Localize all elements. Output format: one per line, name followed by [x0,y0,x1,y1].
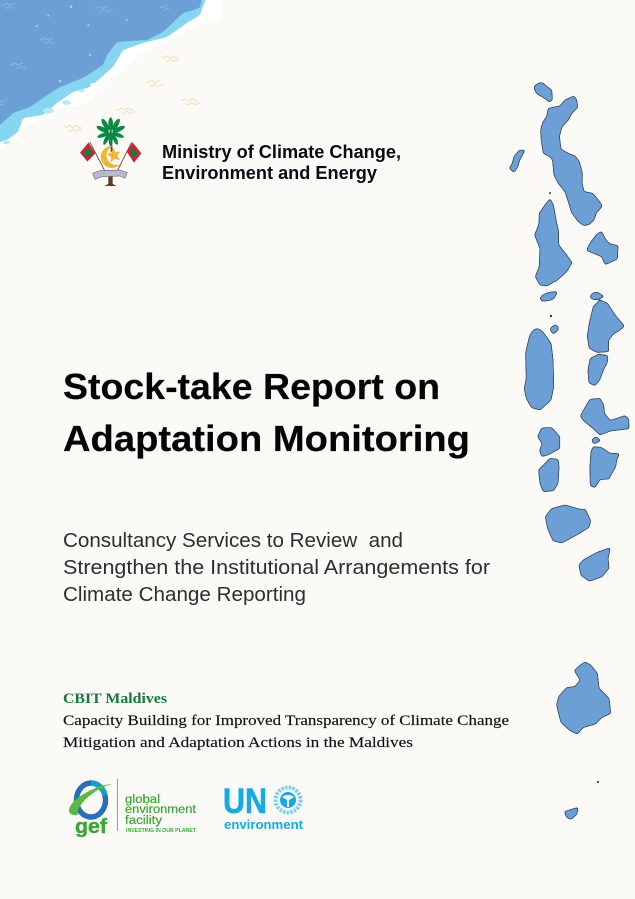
logo: UN environment: environment [224,818,304,832]
logo: global environment facility: global [125,794,160,806]
project description: Mitigation and Adaptation Actions in the Maldives [63,735,413,751]
map: Maldives atolls [509,83,629,819]
title: Stock-take Report on [63,366,440,407]
subtitle: Strengthen the Institutional Arrangements for [63,557,490,579]
icon: Maldives state emblem [80,117,141,186]
logo: global environment facility: INVESTING IN OUR PLANET [126,828,196,834]
logo: UN environment [223,782,304,832]
logo: UN environment: UN [223,782,267,821]
title: Adaptation Monitoring [63,418,470,459]
shoreline: ocean, surf and foam [0,0,221,160]
project name: CBIT Maldives [63,691,167,707]
logo: global environment facility: gef [75,816,107,838]
subtitle: Climate Change Reporting [63,584,306,606]
logo: global environment facility [69,779,197,838]
heading: ministry name: Ministry of Climate Change, [162,141,401,162]
logo: global environment facility: facility [125,815,162,827]
project description: Capacity Building for Improved Transparency of Climate Change [63,713,509,729]
sand ripples [64,56,200,131]
heading: ministry name: Environment and Energy [162,162,378,183]
logo: global environment facility: environment [125,804,197,816]
subtitle: Consultancy Services to Review and [63,530,403,552]
